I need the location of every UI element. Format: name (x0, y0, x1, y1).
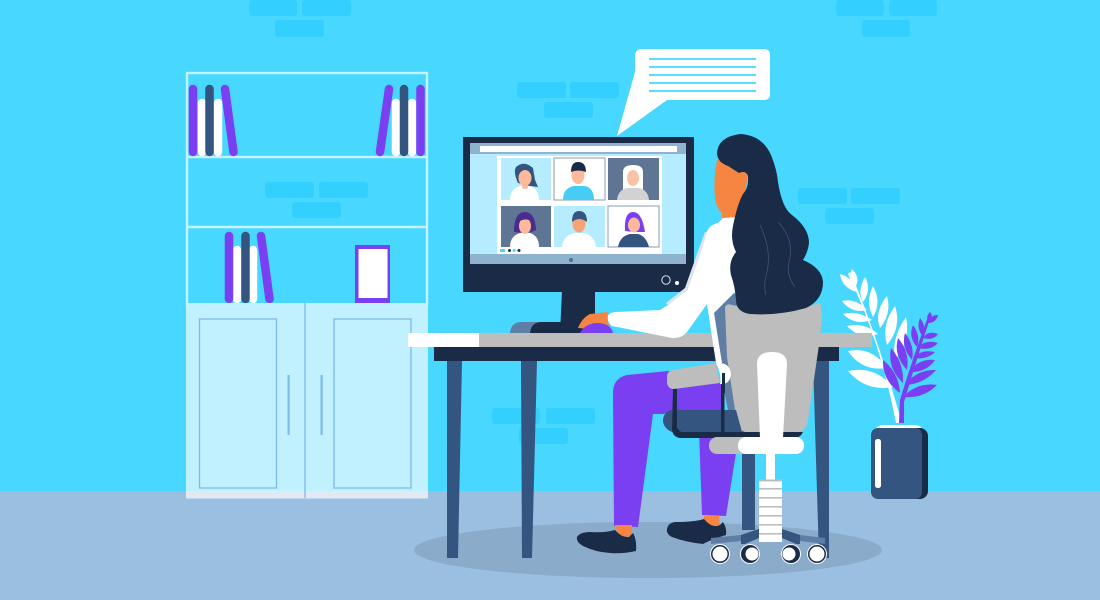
speech bubble (617, 49, 770, 136)
hair strands (760, 222, 795, 295)
monitor (463, 137, 694, 333)
hair (717, 134, 823, 314)
call controls (500, 249, 520, 252)
arm shading (666, 232, 707, 305)
bookcase (186, 73, 428, 498)
video tile 5 (554, 206, 605, 247)
armrest joint (716, 363, 731, 384)
woman (577, 134, 823, 553)
video tile 2 (554, 158, 605, 200)
monitor stand (560, 291, 595, 333)
chair backrest (725, 303, 822, 432)
books: top right (380, 89, 420, 152)
armrest (667, 363, 720, 389)
floor (0, 491, 1100, 600)
shelf frame (187, 73, 427, 305)
plant pot (871, 425, 928, 499)
status light (675, 281, 679, 285)
picture frame (355, 245, 390, 303)
chair base (711, 529, 825, 544)
far shoe (667, 519, 726, 544)
near shoe (577, 530, 636, 553)
video tile 6 (608, 206, 659, 247)
seat bracket (672, 388, 803, 438)
torso and arm (608, 217, 737, 363)
ear (730, 174, 746, 190)
chair post (757, 352, 787, 438)
books: top left (193, 89, 234, 152)
far leg (699, 430, 736, 516)
video tile 1 (501, 158, 551, 200)
desk underside (434, 347, 839, 361)
far sock (704, 516, 720, 527)
chair seat (663, 352, 827, 564)
white fronds (840, 269, 907, 423)
video tile 3 (608, 158, 659, 200)
chair wheels (710, 544, 827, 564)
gas lift (766, 453, 775, 481)
lower seat (709, 437, 759, 454)
screen (470, 143, 686, 264)
desk top (408, 333, 479, 347)
mouse (580, 323, 613, 333)
books: lower shelf (229, 236, 270, 299)
face (714, 160, 750, 215)
wall bricks (249, 0, 937, 444)
hand (578, 312, 610, 329)
cabinet (186, 303, 428, 498)
neck (722, 205, 740, 225)
floor shadow (414, 522, 882, 578)
chair side (714, 293, 750, 432)
armrest support (721, 372, 724, 434)
purple fronds (883, 312, 938, 423)
seat cushion (663, 410, 742, 432)
desk (408, 333, 872, 558)
chair back (714, 293, 822, 432)
near leg (613, 371, 723, 527)
monitor body (463, 137, 694, 292)
desk legs (447, 361, 829, 558)
plant (840, 269, 938, 499)
near sock (615, 525, 632, 537)
video tile 4 (501, 206, 551, 247)
chair cylinder (759, 480, 782, 542)
power button (662, 276, 670, 284)
